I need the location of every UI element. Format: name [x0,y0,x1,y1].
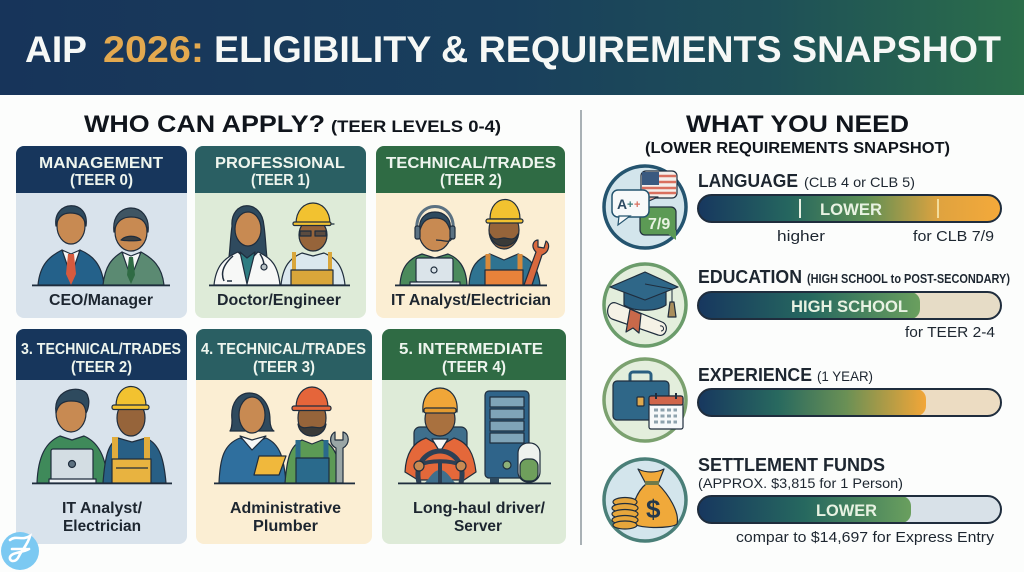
card header [16,146,187,193]
bar: language [698,195,1001,222]
card header: (TEER 4) [442,359,506,376]
card header [16,329,187,380]
caption: CEO/Manager [49,292,153,309]
title: AIP [25,29,87,70]
icon: language bubbles: + [627,199,633,211]
caption: Long-haul driver/ [413,500,546,517]
icon: money bag and coins: $ [646,494,661,524]
icon: graduation cap and diploma [604,264,686,346]
label [698,455,903,491]
caption: Administrative [230,500,341,517]
card: technical trades teer 2 [376,146,565,318]
card header [195,146,366,193]
logo badge [1,532,39,570]
heading: who can apply: (TEER LEVELS 0-4) [331,117,501,136]
caption [230,500,341,535]
card header: (TEER 1) [251,172,310,189]
note: for CLB 7/9 [913,228,994,245]
card header [376,146,565,193]
heading: what you need: WHAT YOU NEED [686,111,909,138]
row: settlement funds [604,455,1001,546]
card header: (TEER 0) [70,172,133,189]
card header: (TEER 2) [71,359,132,376]
label [698,267,1010,287]
heading: who can apply [84,111,501,138]
card header [382,329,566,380]
caption [62,500,143,535]
icon: language bubbles: A [617,196,627,212]
bar: education [698,292,1001,319]
heading: what you need [645,111,950,157]
icon: administrator and plumber [214,387,355,484]
caption: Doctor/Engineer [217,292,341,309]
card header: 3. TECHNICAL/TRADES [21,341,181,358]
row: language [604,166,1001,248]
label: EDUCATION [698,267,802,287]
card header: TECHNICAL/TRADES [386,155,556,172]
icon: language bubbles: + [634,199,640,211]
card header: (TEER 2) [440,172,502,189]
bar: language: LOWER [820,200,882,219]
caption: IT Analyst/Electrician [391,292,551,309]
note: higher [777,228,825,245]
label [698,171,915,191]
heading: who can apply: WHO CAN APPLY? [84,111,325,138]
row: experience [604,359,1001,441]
caption: Server [454,518,502,535]
card: 4 technical trades teer 3 [196,329,372,544]
caption: IT Analyst/ [62,500,143,517]
icon: IT analyst and electrician [395,200,549,286]
label: (1 YEAR) [817,368,873,384]
title: ELIGIBILITY & REQUIREMENTS SNAPSHOT [214,29,1001,70]
bar: settlement funds: LOWER [816,501,877,520]
card: professional teer 1 [195,146,366,318]
card header: PROFESSIONAL [215,155,345,172]
label: EXPERIENCE [698,365,812,385]
bar: experience [698,389,1001,416]
heading: what you need: (LOWER REQUIREMENTS SNAPSHOT) [645,140,950,157]
card header [196,329,372,380]
icon: language bubbles [604,166,686,248]
row: education [604,264,1010,346]
bar: education: HIGH SCHOOL [791,297,908,316]
card header: MANAGEMENT [39,155,163,172]
icon: language bubbles: 7/9 [648,216,670,233]
caption: Electrician [63,518,141,535]
note: for TEER 2-4 [905,324,995,341]
label: SETTLEMENT FUNDS [698,455,885,475]
card: 5 intermediate teer 4 [382,329,566,544]
label: LANGUAGE [698,171,798,191]
label: (APPROX. $3,815 for 1 Person) [698,475,903,491]
icon: IT analyst and electrician [32,386,172,484]
caption: Plumber [253,518,318,535]
icon: two managers [32,206,170,286]
caption [413,500,546,535]
card header: (TEER 3) [253,359,315,376]
card: 3 technical trades teer 2 [16,329,187,544]
card header: 4. TECHNICAL/TRADES [201,341,366,358]
card header: 5. INTERMEDIATE [399,341,543,358]
label: (CLB 4 or CLB 5) [804,174,915,190]
note: compar to $14,697 for Express Entry [736,529,995,546]
header band [0,0,1024,95]
bar: settlement funds [698,496,1001,523]
icon: driver and server [398,388,551,484]
card: management teer 0 [16,146,187,318]
icon: money bag and coins [604,459,686,541]
icon: briefcase and calendar [604,359,686,441]
icon: doctor and engineer [209,203,350,286]
title: 2026: [103,29,204,70]
note [777,228,994,245]
label [698,365,873,385]
